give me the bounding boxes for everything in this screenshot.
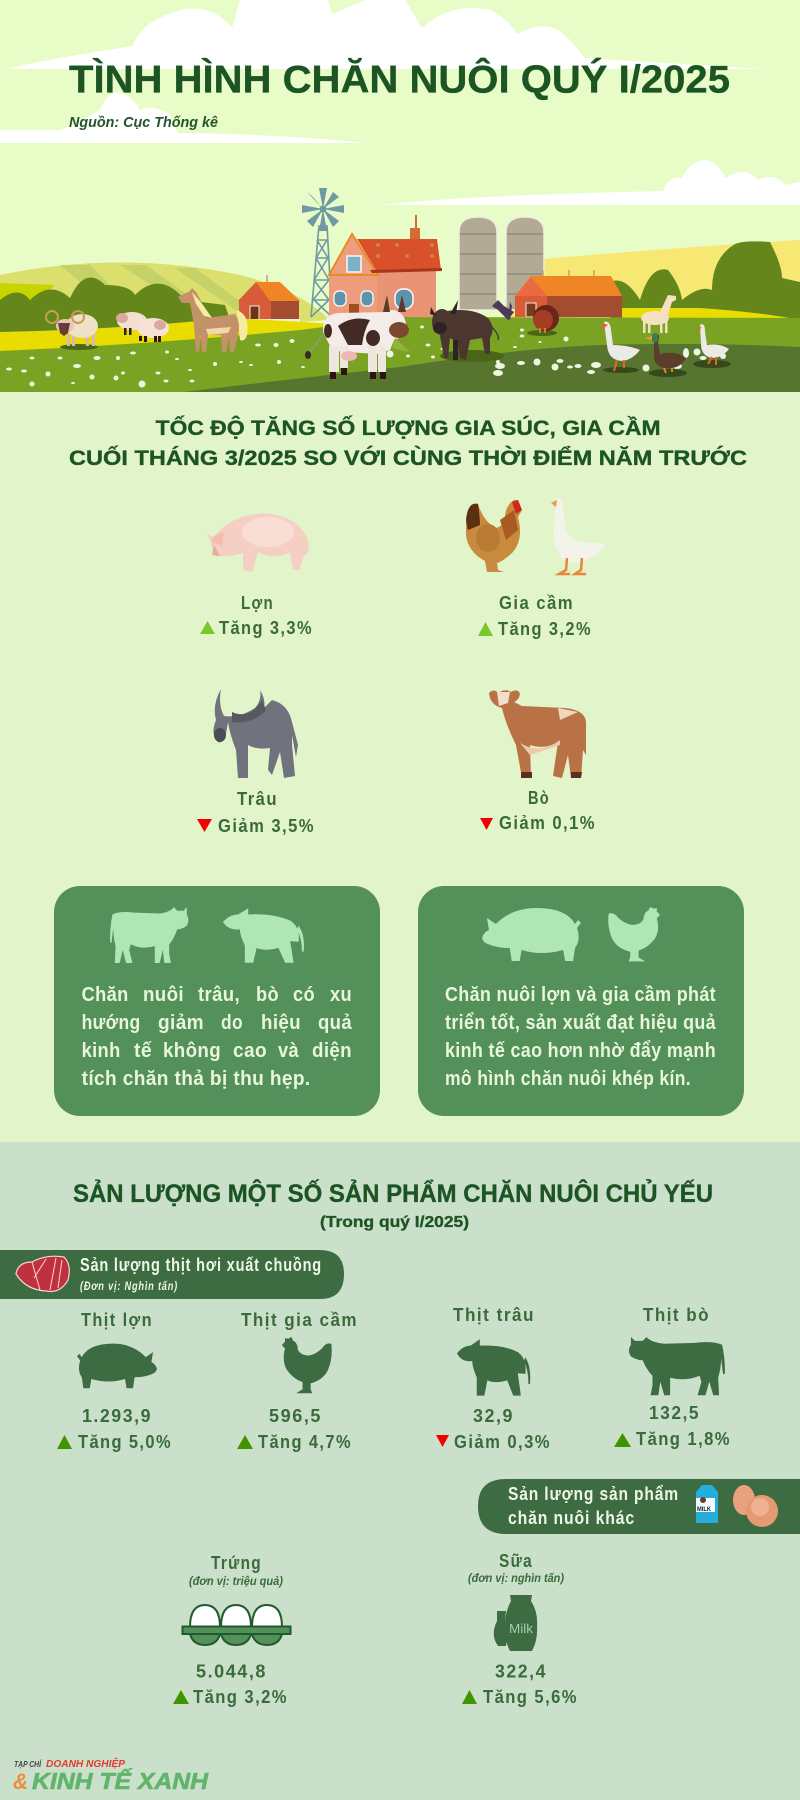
change up: Tăng 4,7%: [258, 1431, 352, 1452]
illustration: turkey: [527, 305, 559, 336]
logo: KINH TẾ XANH: [32, 1767, 208, 1794]
icon: buffalo silhouette: [223, 908, 304, 963]
icon: milk bottles: Milk: [509, 1621, 534, 1636]
text block: và: [278, 1039, 299, 1062]
icon: pig: [207, 513, 309, 572]
illustration: goat: [641, 295, 676, 333]
banner: live meat: [0, 1250, 344, 1299]
text block: Chăn: [82, 983, 129, 1006]
label: Thịt bò: [643, 1304, 710, 1325]
illustration: spotted cow: [305, 295, 410, 379]
icon: buffalo: [213, 689, 298, 778]
logo: DOANH NGHIỆP: [46, 1757, 125, 1770]
text block: mô hình chăn nuôi khép kín.: [445, 1067, 691, 1090]
item: pork: [57, 1309, 172, 1452]
heading: growth rate: TỐC ĐỘ TĂNG SỐ LƯỢNG GIA SÚC, GIA CẦM: [156, 414, 661, 440]
illustration: big barn: [515, 270, 622, 317]
heading: production: SẢN LƯỢNG MỘT SỐ SẢN PHẨM CHĂN NUÔI CHỦ YẾU: [73, 1178, 713, 1208]
item: cow: [480, 690, 596, 833]
logo: [13, 1757, 208, 1794]
label: Trâu: [237, 788, 278, 809]
text block: hiệu: [261, 1011, 301, 1034]
icon: egg tray: [182, 1605, 290, 1645]
logo: &: [13, 1769, 28, 1794]
change up: Tăng 1,8%: [636, 1428, 731, 1449]
change up: Tăng 5,6%: [483, 1686, 578, 1707]
change up: Tăng 5,0%: [78, 1431, 172, 1452]
item: buffalo meat: [436, 1304, 551, 1452]
illustration: dog: [492, 300, 514, 320]
text block: kinh tế cao hơn nhờ đẩy mạnh: [445, 1039, 716, 1062]
item: beef: [614, 1304, 731, 1449]
sky background: [0, 0, 800, 392]
value: 596,5: [269, 1405, 322, 1426]
text block: [82, 983, 352, 1090]
section background: livestock growth: [0, 392, 800, 1142]
value: 5.044,8: [196, 1660, 267, 1682]
heading: growth rate: CUỐI THÁNG 3/2025 SO VỚI CÙNG THỜI ĐIỂM NĂM TRƯỚC: [69, 444, 747, 470]
illustration: small barn: [238, 275, 300, 322]
label: Bò: [528, 787, 550, 808]
icon: eggs: [733, 1485, 778, 1527]
label: Trứng: [211, 1552, 262, 1573]
text block: xu: [330, 983, 352, 1006]
icon: cow: [489, 690, 586, 778]
item: pig: [200, 513, 313, 638]
icon: pig silhouette: [482, 908, 581, 961]
text block: có: [293, 983, 315, 1006]
banner title: Sản lượng thịt hơi xuất chuồng: [80, 1255, 322, 1275]
heading: growth rate: [69, 414, 747, 470]
change down: Giảm 0,3%: [454, 1431, 551, 1452]
text block: nuôi: [143, 983, 184, 1006]
label: Gia cầm: [499, 592, 574, 613]
value: 132,5: [649, 1402, 700, 1423]
text block: kinh: [82, 1039, 121, 1062]
change down: Giảm 3,5%: [218, 815, 315, 836]
icon: cow silhouette: [110, 907, 188, 963]
icon: buffalo: [457, 1339, 530, 1396]
illustration: yellow fields and ground: [0, 308, 800, 392]
change up: Tăng 3,2%: [193, 1686, 288, 1707]
icon: hen: [282, 1337, 332, 1393]
text block: tế: [134, 1039, 152, 1062]
source: Nguồn: Cục Thống kê: [69, 114, 218, 131]
text block: diện: [312, 1039, 352, 1062]
item: poultry: [466, 498, 606, 639]
item: eggs: [173, 1552, 290, 1707]
text block: triển tốt, sản xuất đạt hiệu quả: [445, 1011, 716, 1034]
icon: milk carton: MILK: [697, 1507, 712, 1513]
value: 1.293,9: [82, 1405, 152, 1426]
text block: giảm: [158, 1011, 204, 1034]
text block: Chăn nuôi lợn và gia cầm phát: [445, 983, 716, 1006]
text block: tích chăn thả bị thu hẹp.: [82, 1067, 311, 1090]
label: Lợn: [241, 592, 274, 613]
panel: pig and poultry note: [418, 886, 744, 1116]
banner unit: (Đơn vị: Nghìn tấn): [80, 1279, 178, 1293]
change up: Tăng 3,2%: [498, 618, 592, 639]
label: Thịt lợn: [81, 1309, 153, 1330]
text block: không: [163, 1039, 221, 1062]
banner: other products: [478, 1479, 800, 1534]
value: 322,4: [495, 1660, 547, 1682]
banner title: [508, 1484, 679, 1528]
label: Thịt trâu: [453, 1304, 535, 1325]
illustration: clouds: [0, 0, 800, 205]
text block: bò: [256, 983, 279, 1006]
icon: cow: [629, 1337, 725, 1395]
logo: TẠP CHÍ: [14, 1760, 43, 1769]
change up: Tăng 3,3%: [219, 617, 313, 638]
icon: hen silhouette: [608, 907, 660, 961]
text block: trâu,: [198, 983, 240, 1006]
illustration: hills and trees: [0, 240, 800, 340]
item: milk: [462, 1550, 578, 1707]
text block: cao: [233, 1039, 267, 1062]
illustration: meadow flowers: [6, 326, 726, 388]
icon: goose: [551, 498, 606, 574]
illustration: windmill: [302, 188, 344, 317]
illustration: sheep: [116, 312, 169, 342]
icon: meat: [16, 1256, 69, 1292]
icon: milk bottles: [494, 1595, 537, 1651]
item: buffalo: [197, 689, 315, 836]
text block: [445, 983, 716, 1090]
label: Sữa: [499, 1550, 533, 1571]
title: TÌNH HÌNH CHĂN NUÔI QUÝ I/2025: [69, 56, 730, 102]
illustration: farmhouse: [329, 215, 442, 322]
banner title: chăn nuôi khác: [508, 1508, 635, 1528]
text block: quả: [318, 1011, 352, 1034]
section background: production: [0, 1142, 800, 1800]
illustration: geese and duck: [601, 322, 731, 377]
illustration: silos: [459, 217, 544, 310]
text block: hướng: [82, 1011, 141, 1034]
unit: (đơn vị: nghìn tấn): [468, 1571, 564, 1585]
label: Thịt gia cầm: [241, 1309, 358, 1330]
subheading: (Trong quý I/2025): [320, 1214, 469, 1231]
illustration: horse: [178, 288, 248, 352]
illustration: ram: [46, 311, 98, 350]
unit: (đơn vị: triệu quả): [189, 1574, 283, 1588]
text block: do: [221, 1011, 243, 1034]
item: poultry meat: [237, 1309, 358, 1452]
icon: hen: [466, 500, 522, 572]
change down: Giảm 0,1%: [499, 812, 596, 833]
banner title: Sản lượng sản phẩm: [508, 1484, 679, 1504]
panel: buffalo and cattle note: [54, 886, 380, 1116]
illustration: dark bull: [430, 300, 504, 362]
value: 32,9: [473, 1405, 514, 1426]
icon: milk carton: [696, 1485, 718, 1523]
icon: pig: [77, 1344, 157, 1388]
